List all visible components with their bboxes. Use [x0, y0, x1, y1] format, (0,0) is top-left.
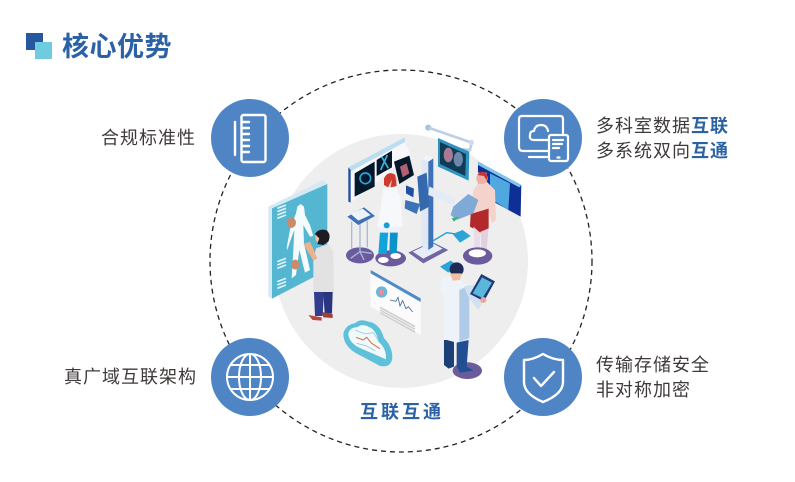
label: interconnect — [596, 116, 729, 160]
badge: monitor and tablet icon — [504, 99, 582, 177]
medical scene illustration — [268, 125, 521, 379]
label: interconnect: 多科室数据互联 — [596, 116, 729, 136]
badge: shield check icon — [504, 338, 582, 416]
lung x-ray screen — [438, 138, 469, 181]
badge: ruler icon — [211, 99, 289, 177]
wall x-ray monitors — [348, 137, 414, 203]
title icon: overlapping squares — [26, 33, 52, 59]
badge: globe icon — [211, 338, 289, 416]
medical cart — [346, 207, 375, 263]
label: WAN architecture: 真广域互联架构 — [64, 367, 197, 387]
label: compliance: 合规标准性 — [101, 128, 196, 148]
dashed orbit ring — [210, 70, 592, 452]
large blue screen — [478, 162, 521, 217]
x-ray machine column — [405, 155, 478, 263]
doctor with tablet — [439, 262, 495, 379]
body chart panel — [268, 180, 327, 299]
label: interconnect: 多系统双向互通 — [596, 140, 729, 160]
central grey disc — [274, 134, 528, 388]
label: security: 非对称加密 — [596, 380, 691, 400]
centre caption: 互联互通 — [360, 402, 444, 422]
monitor card with heart trace — [370, 270, 421, 335]
doctor reading chart — [303, 230, 334, 321]
ceiling lamp arm — [425, 125, 474, 150]
cloud data icon — [343, 320, 392, 366]
patient — [463, 172, 496, 265]
doctor with red hair — [375, 173, 406, 266]
label: security — [596, 355, 710, 400]
label: security: 传输存储安全 — [596, 355, 710, 375]
floor pad — [440, 261, 459, 273]
title: 核心优势 — [62, 32, 172, 62]
